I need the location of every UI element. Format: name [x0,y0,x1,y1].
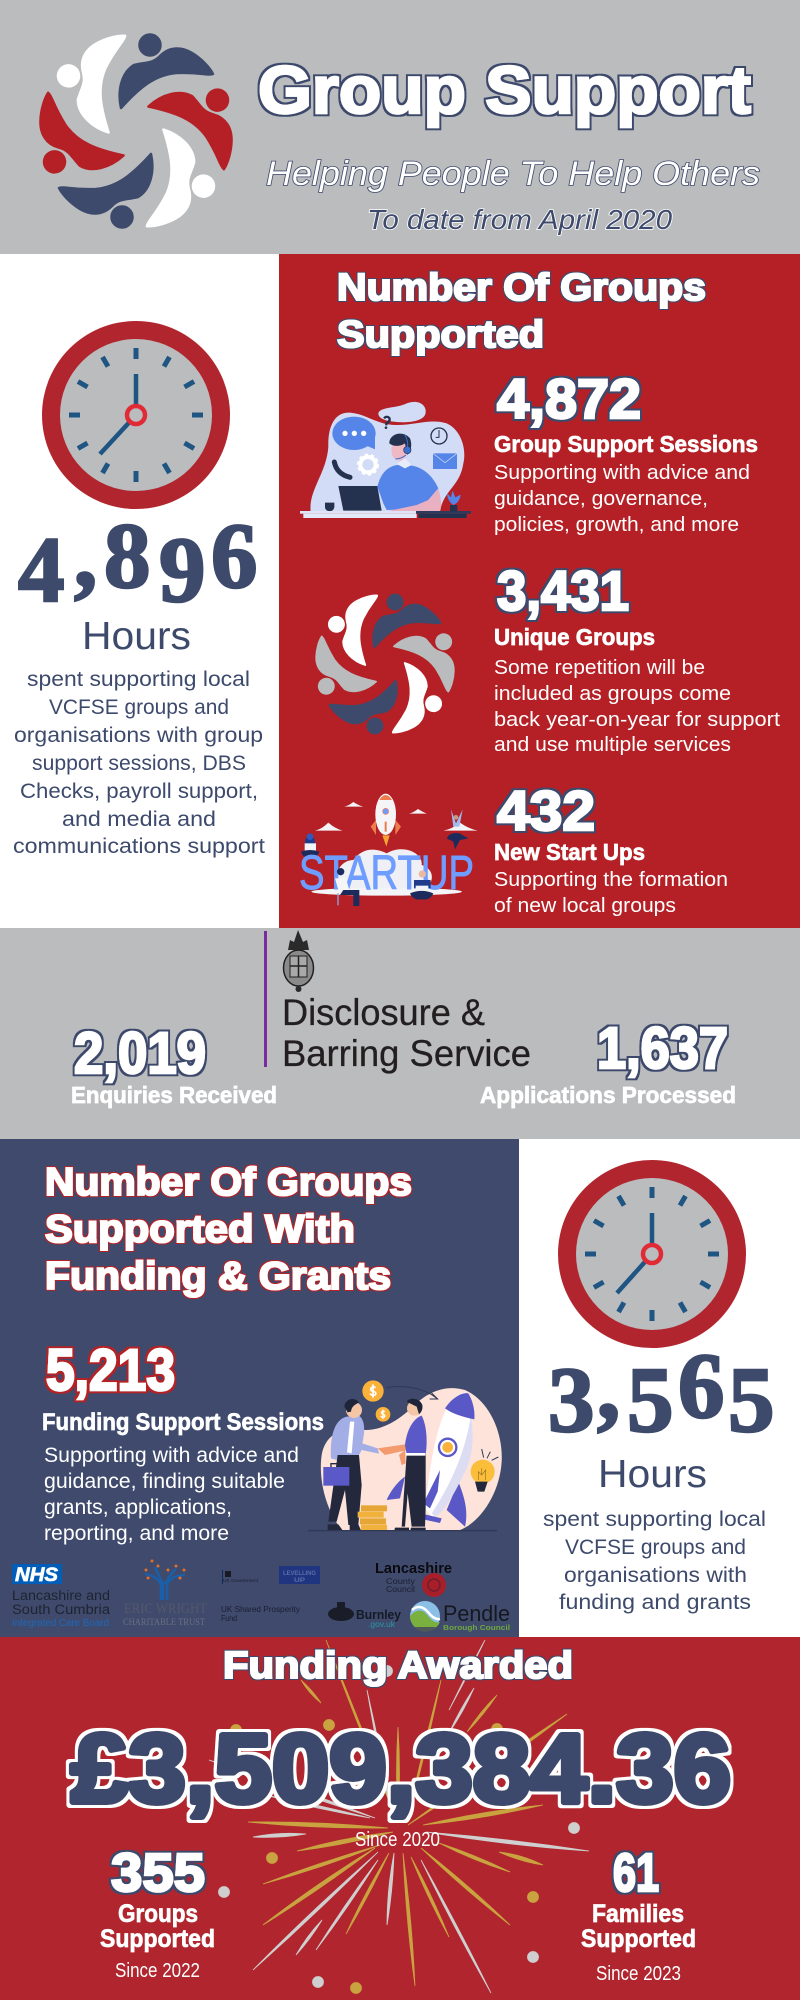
logo: Burnley [328,1602,402,1629]
description: and media and [62,808,216,831]
description: spent supporting local [27,668,250,691]
stat: funding support sessions: guidance, finding suitable [44,1470,285,1493]
stat: unique groups: Unique Groups [494,624,655,650]
stat: funding support sessions: reporting, and more [44,1522,229,1545]
logo: UK Shared Prosperity Fund: Fund [221,1613,237,1623]
stat: groups supported [100,1843,215,1982]
panel: funding and grants [0,1139,519,1637]
stat: unique groups: back year-on-year for support [494,709,780,731]
title: Group Support [258,53,751,128]
logo: DBS: Barring Service [282,1033,531,1074]
unit label: Hours [598,1453,707,1496]
stat: families supported: Supported [581,1925,696,1953]
funder logos [12,1560,510,1632]
stat: group support sessions: policies, growth, and more [494,514,739,536]
logo: pinwheel of people [14,16,258,246]
logo: Burnley: Burnley [356,1607,402,1622]
stat: groups supported: Since 2022 [115,1960,200,1982]
logo: UK Government Levelling Up: UK Government [223,1578,259,1583]
panel: header [0,0,800,254]
date note: To date from April 2020 [367,204,672,235]
stat: group support sessions: Supporting with advice and [494,462,750,484]
logo: pinwheel on red [297,581,473,747]
description: Checks, payroll support, [20,780,258,803]
stat: new start ups [494,779,728,917]
logo: NHS Lancashire and South Cumbria: Lancashire and [12,1588,110,1603]
logo: Lancashire County Council: Council [386,1585,415,1594]
panel: number of groups supported [279,254,800,928]
panel: disclosure and barring service [0,928,800,1139]
heading: Funding Awarded [223,1645,573,1687]
illustration: support agent [300,402,471,518]
stat: applications processed [480,1016,736,1108]
stat: enquiries received [71,1021,277,1108]
logo: UK Government Levelling Up [222,1566,320,1584]
logo: Burnley: .gov.uk [368,1619,396,1629]
description: organisations with [564,1564,747,1587]
stat: unique groups [494,559,780,756]
panel: hours spent on funding support [519,1139,800,1637]
stat: unique groups: and use multiple services [494,734,731,756]
description: organisations with group [14,724,263,747]
stat: group support sessions [494,367,758,536]
logo: Lancashire County Council: Lancashire [375,1560,452,1577]
stat: families supported [581,1843,696,1985]
logo: DBS [264,930,531,1074]
description: funding and grants [559,1591,751,1614]
heading: Number Of Groups [337,267,706,309]
description: communications support [13,835,265,858]
heading: Supported [337,314,544,356]
stat: group support sessions: 4,872 [497,367,641,430]
stat: new start ups: New Start Ups [494,839,645,865]
icon: clock [42,321,230,509]
icon: clock [558,1160,746,1348]
panel: hours spent on group support [0,254,279,928]
logo: Pendle: Pendle [443,1601,510,1626]
description: support sessions, DBS [32,752,246,775]
stat: total funding: £3,509,384.36 [71,1714,731,1823]
description [13,668,265,858]
panel: funding awarded [0,1637,800,2000]
unit label: Hours [82,615,191,658]
subtitle: Helping People To Help Others [266,155,760,193]
logo: NHS Lancashire and South Cumbria: Integrated Care Board [12,1618,109,1629]
stat: hours: 3,565 [548,1335,774,1452]
illustration: startup: STARTUP [299,847,474,900]
logo: NHS Lancashire and South Cumbria: NHS [15,1565,58,1586]
logo: Pendle: Borough Council [443,1625,510,1632]
stat: group support sessions: guidance, governance, [494,488,708,510]
logo: NHS Lancashire and South Cumbria: South Cumbria [12,1602,111,1617]
stat: hours: 4,896 [18,504,258,622]
stat: new start ups: 432 [497,779,595,842]
illustration: handshake and rocket [308,1380,502,1531]
logo: UK Government Levelling Up: LEVELLING [283,1570,316,1577]
stat: funding support sessions [42,1338,324,1545]
stat: funding support sessions: grants, applications, [44,1496,232,1519]
heading [337,267,706,356]
stat: applications processed: Applications Processed [480,1082,736,1108]
logo: Pendle [410,1601,510,1632]
description: VCFSE groups and [49,696,229,719]
logo: UK Shared Prosperity Fund [221,1604,301,1623]
logo: Lancashire County Council: County [386,1577,415,1586]
stat: groups supported: Groups [118,1900,198,1928]
stat: funding support sessions: Supporting with advice and [44,1444,299,1467]
logo: DBS: Disclosure & [282,992,485,1033]
stat: funding support sessions: 5,213 [46,1338,175,1403]
heading: Supported With [45,1208,355,1251]
illustration: startup [299,794,478,906]
stat: unique groups: included as groups come [494,683,731,705]
stat: unique groups: Some repetition will be [494,657,705,679]
logo: UK Shared Prosperity Fund: UK Shared Prosperity [221,1604,301,1614]
logo: Eric Wright Charitable Trust: CHARITABLE TRUST [123,1617,205,1627]
stat: funding support sessions: Funding Support Sessions [42,1409,324,1436]
stat: groups supported: 355 [111,1843,205,1903]
description: spent supporting local [543,1508,766,1531]
stat: group support sessions: Group Support Sessions [494,431,758,457]
logo: Lancashire County Council [375,1560,452,1597]
stat: unique groups: 3,431 [497,559,629,622]
logo: NHS Lancashire and South Cumbria [12,1564,111,1629]
stat: new start ups: of new local groups [494,895,676,917]
stat: families supported: Families [592,1900,684,1928]
heading: Number Of Groups [45,1161,412,1204]
firework graphic [209,1640,589,1994]
stat: families supported: Since 2023 [596,1963,681,1985]
stat: applications processed: 1,637 [597,1016,728,1081]
stat: enquiries received: 2,019 [74,1021,206,1086]
heading [45,1161,412,1298]
description: VCFSE groups and [565,1536,746,1559]
note: since 2020: Since 2020 [355,1829,440,1851]
heading: Funding & Grants [45,1255,391,1298]
logo: UK Government Levelling Up: UP [294,1577,306,1584]
stat: enquiries received: Enquiries Received [71,1082,277,1108]
stat: groups supported: Supported [100,1925,215,1953]
stat: new start ups: Supporting the formation [494,869,728,891]
stat: families supported: 61 [613,1843,659,1903]
logo: Eric Wright Charitable Trust: ERIC WRIGHT [124,1601,207,1617]
logo: Eric Wright Charitable Trust [123,1560,207,1627]
description [543,1508,766,1614]
